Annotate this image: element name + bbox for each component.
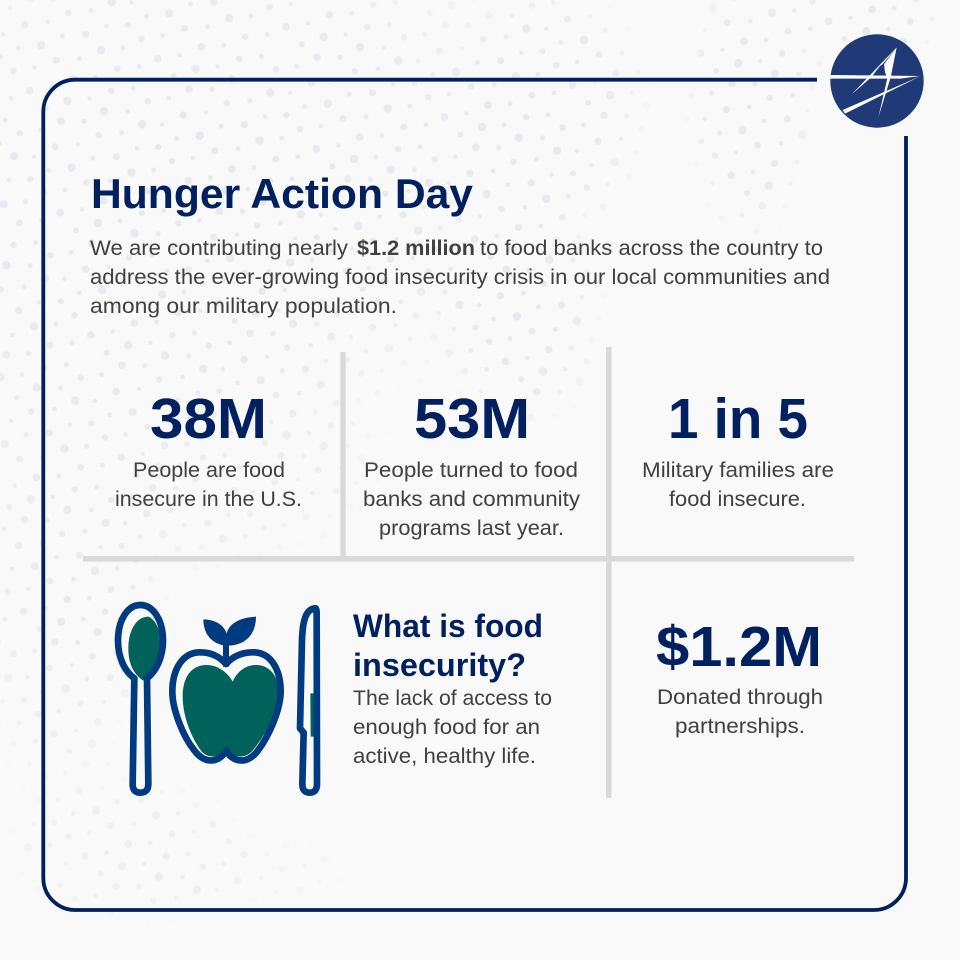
intro text bbox=[90, 237, 830, 318]
stat: 38M: insecure in the U.S. bbox=[115, 488, 302, 511]
stat: 53M bbox=[363, 387, 581, 540]
intro text: to food banks across the country to bbox=[480, 237, 823, 260]
stat: 1 in 5: 1 in 5 bbox=[668, 387, 808, 451]
heading: what is food insecurity: insecurity? bbox=[353, 647, 526, 683]
stat: 53M: programs last year. bbox=[379, 517, 564, 540]
definition text bbox=[353, 687, 552, 768]
stat: 53M: 53M bbox=[414, 387, 530, 451]
heading: what is food insecurity bbox=[353, 608, 543, 683]
stat: 38M bbox=[115, 387, 302, 511]
intro text: $1.2 million bbox=[357, 237, 475, 260]
icon: spoon bbox=[118, 605, 163, 793]
heading: what is food insecurity: What is food bbox=[353, 608, 543, 644]
stat: 53M: banks and community bbox=[363, 488, 581, 511]
intro text: address the ever-growing food insecurity crisis in our local communities and bbox=[90, 266, 830, 289]
icon: knife bbox=[300, 608, 317, 793]
stat: 1 in 5: Military families are bbox=[642, 459, 834, 482]
divider lines bbox=[83, 347, 854, 798]
logo: star in circle bbox=[830, 34, 924, 128]
stat: $1.2M: partnerships. bbox=[675, 715, 805, 738]
definition text: active, healthy life. bbox=[353, 745, 536, 768]
stat: 53M: People turned to food bbox=[364, 459, 578, 482]
icon: apple bbox=[172, 617, 281, 760]
rounded frame bbox=[43, 80, 906, 910]
stat: $1.2M: Donated through bbox=[657, 686, 823, 709]
stat: 38M: 38M bbox=[150, 387, 267, 451]
stat: 38M: People are food bbox=[133, 459, 285, 482]
stat: $1.2M bbox=[656, 615, 823, 738]
icon: spoon, apple and knife bbox=[118, 605, 317, 793]
stat: 1 in 5: food insecure. bbox=[669, 488, 806, 511]
title: Hunger Action Day bbox=[91, 170, 474, 217]
definition text: enough food for an bbox=[353, 716, 540, 739]
intro text: among our military population. bbox=[90, 295, 397, 318]
definition text: The lack of access to bbox=[353, 687, 552, 710]
stat: 1 in 5 bbox=[642, 387, 834, 511]
intro text: We are contributing nearly bbox=[90, 237, 349, 260]
stat: $1.2M: $1.2M bbox=[656, 615, 822, 679]
